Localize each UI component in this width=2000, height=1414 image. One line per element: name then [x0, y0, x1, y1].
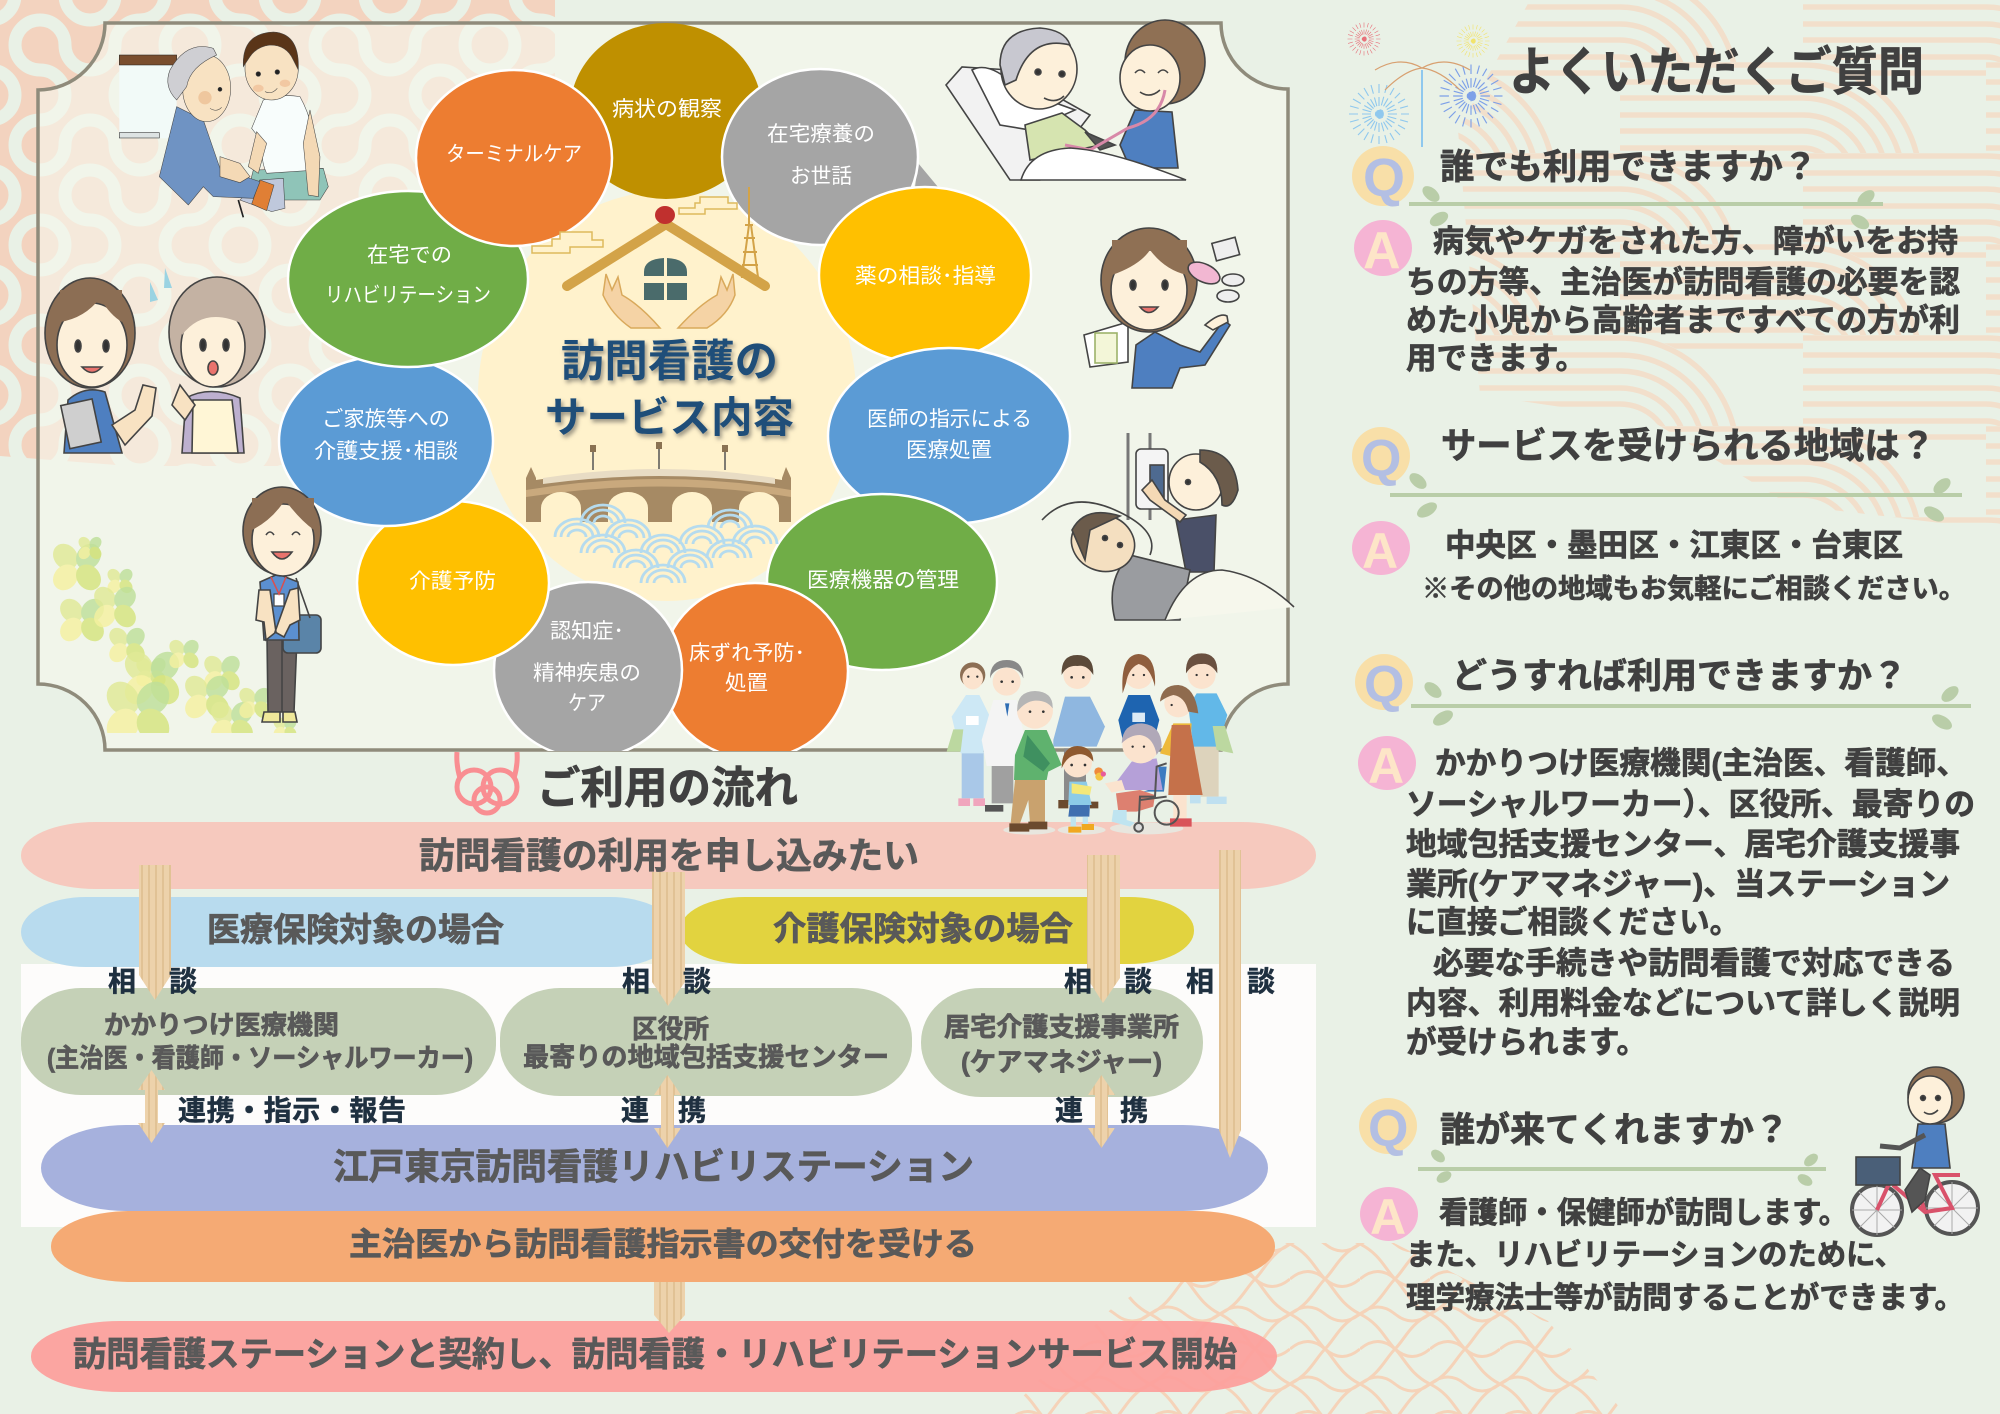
flow: かかりつけ医療機関: かかりつけ医療機関	[104, 1010, 339, 1040]
answer: かかりつけ医療機関(主治医、看護師、	[1435, 746, 1967, 781]
flow: 主治医から訪問看護指示書の交付を受ける	[51, 1211, 1275, 1282]
arrow: ward office to station	[654, 1075, 681, 1148]
flow: 介護保険対象の場合: 介護保険対象の場合	[773, 910, 1073, 947]
centre title: 訪問看護の	[561, 337, 778, 386]
FAQ 4	[1359, 1098, 1964, 1315]
A badge	[1358, 736, 1416, 794]
Q badge: Q	[1361, 430, 1401, 488]
illustration: family and care team	[947, 653, 1233, 835]
Q badge: Q	[1368, 1100, 1408, 1158]
flow: 医療保険対象の場合: 医療保険対象の場合	[207, 911, 504, 948]
answer: めた小児から高齢者まですべての方が利	[1406, 303, 1960, 338]
flow: 区役所: 最寄りの地域包括支援センター	[523, 1042, 889, 1072]
flow: 訪問看護の利用を申し込みたい: 訪問看護の利用を申し込みたい	[419, 835, 919, 876]
answer	[1406, 1196, 1964, 1315]
answer: ちの方等、主治医が訪問看護の必要を認	[1406, 265, 1960, 300]
circle: 床ずれ予防・処置	[662, 583, 848, 759]
A badge	[1352, 521, 1410, 579]
heading text: よくいただくご質問	[1509, 44, 1924, 102]
bubble tail	[915, 163, 938, 187]
answer: 看護師・保健師が訪問します。	[1439, 1196, 1848, 1230]
answer: 業所(ケアマネジャー)、当ステーション	[1406, 867, 1950, 902]
heading: ご利用の流れ: ご利用の流れ	[537, 764, 798, 813]
answer: 地域包括支援センター、居宅介護支援事	[1406, 827, 1960, 862]
flow: 区役所	[500, 988, 912, 1096]
circle: 在宅でのリハビリテーション: 在宅での	[367, 244, 452, 267]
Q badge	[1352, 427, 1410, 488]
label: 相談: 相 談	[1186, 966, 1275, 997]
A badge: A	[1362, 523, 1398, 579]
answer: 用できます。	[1406, 341, 1586, 376]
arrow: clinic to station	[138, 1070, 165, 1143]
A badge: A	[1363, 222, 1401, 280]
circle: 医師の指示による医療処置	[828, 348, 1070, 524]
answer	[1406, 224, 1960, 376]
icon: roof	[567, 224, 765, 286]
answer	[1406, 746, 1975, 1060]
FAQ 2	[1352, 425, 1966, 604]
answer: 理学療法士等が訪問することができます。	[1406, 1281, 1964, 1315]
arrow: to care office	[1087, 855, 1120, 1003]
circle: ご家族等への介護支援・相談: 介護支援･相談	[314, 440, 458, 463]
flow: サービス開始: 訪問看護ステーションと契約し、訪問看護・リハビリテーションサービス開始	[73, 1336, 1237, 1374]
circle: 認知症・精神疾患のケア	[494, 582, 682, 758]
A badge: A	[1368, 738, 1404, 794]
arrow: care office to station	[1088, 1075, 1115, 1148]
label: 連携: 連 携	[621, 1095, 706, 1126]
circle: 病状の観察: 病状の観察	[612, 98, 722, 121]
flow: 江戸東京訪問看護リハビリステーション	[41, 1125, 1268, 1211]
circle: 介護予防: 介護予防	[409, 570, 496, 593]
answer: 病気やケガをされた方、障がいをお持	[1433, 224, 1958, 259]
centre cream blob	[478, 191, 856, 601]
circle: ご家族等への介護支援・相談	[279, 356, 493, 526]
icon: clouds	[532, 197, 737, 253]
arrow: to clinic	[139, 865, 171, 1000]
label: 連携: 連 携	[1055, 1095, 1148, 1126]
vine divider	[1409, 183, 1883, 232]
flow: 居宅介護支援事業所: (ケアマネジャー)	[961, 1047, 1162, 1077]
circle: 在宅でのリハビリテーション	[288, 191, 528, 367]
answer: ソーシャルワーカー）、区役所、最寄りの	[1406, 787, 1975, 822]
circle: 医師の指示による医療処置: 医療処置	[906, 439, 992, 462]
arrow: to ward office	[652, 872, 685, 1006]
circle: 医療機器の管理: 医療機器の管理	[807, 569, 959, 592]
flow: かかりつけ医療機関: (主治医・看護師・ソーシャルワーカー)	[47, 1043, 473, 1073]
background pattern: net	[1005, 1243, 1625, 1414]
Q badge: Q	[1363, 148, 1405, 208]
illustration: nurse adjusting IV pump	[1042, 433, 1294, 620]
centre title: サービス内容	[545, 394, 794, 441]
background pattern: peach swirls	[0, 0, 555, 466]
circle: 在宅でのリハビリテーション: リハビリテーション	[325, 284, 491, 307]
flow: サービス開始	[31, 1321, 1277, 1392]
illustration: nurse talking with older woman	[45, 268, 265, 453]
FAQ 1	[1352, 146, 1960, 376]
circle: ターミナルケア: ターミナルケア	[446, 143, 582, 166]
A badge: A	[1370, 1189, 1406, 1245]
flow: 江戸東京訪問看護リハビリステーション: 江戸東京訪問看護リハビリステーション	[333, 1146, 974, 1187]
Q badge: Q	[1364, 656, 1404, 714]
icon: red sun	[655, 206, 675, 224]
circle: 医療機器の管理	[767, 494, 997, 670]
flow: 居宅介護支援事業所: 居宅介護支援事業所	[944, 1012, 1179, 1042]
circle: 薬の相談・指導	[819, 187, 1031, 363]
icon: fireworks	[1348, 22, 1502, 147]
arrow: to contract	[654, 1282, 685, 1333]
circle: 在宅療養のお世話: 在宅療養の	[767, 123, 875, 146]
circle: 認知症・精神疾患のケア: 精神疾患の	[533, 662, 641, 685]
icon: window	[644, 258, 687, 300]
label: 連携・指示・報告: 連携・指示・報告	[178, 1095, 406, 1126]
circle: 認知症・精神疾患のケア: ケア	[568, 692, 606, 715]
centre title	[545, 337, 794, 441]
circle: ターミナルケア	[416, 70, 612, 246]
flow: 区役所: 区役所	[632, 1014, 709, 1044]
answer: また、リハビリテーションのために、	[1406, 1239, 1904, 1272]
vine divider	[1411, 679, 1971, 733]
circle: 薬の相談・指導: 薬の相談･指導	[855, 265, 996, 288]
question: サービスを受けられる地域は？	[1441, 425, 1935, 466]
circle: 在宅療養のお世話	[722, 69, 918, 245]
FAQ 3	[1355, 654, 1975, 1060]
circle: 介護予防	[357, 501, 549, 665]
background pattern: concentric arcs	[1458, 0, 2000, 530]
label: 相談: 相 談	[108, 966, 197, 997]
answer: 必要な手続きや訪問看護で対応できる	[1433, 946, 1955, 981]
FAQ heading with fireworks	[1348, 22, 1924, 147]
note: ※その他の地域もお気軽にご相談ください。	[1422, 573, 1966, 604]
icon: tower	[742, 187, 758, 277]
flow labels	[108, 966, 1275, 1126]
icon: mizuhiki knot	[457, 752, 517, 813]
label: 相談: 相 談	[1064, 966, 1152, 997]
flow: かかりつけ医療機関	[21, 988, 496, 1095]
answer: が受けられます。	[1406, 1025, 1647, 1060]
flow: 主治医から訪問看護指示書の交付を受ける: 主治医から訪問看護指示書の交付を受ける	[349, 1226, 977, 1262]
arrow: to station	[1219, 850, 1241, 1158]
icon: bridge	[526, 442, 791, 522]
illustration: nurse checking blood pressure of patient in bed	[946, 20, 1205, 180]
icon: hands	[603, 274, 735, 328]
heading: ご利用の流れ	[457, 752, 798, 813]
centre illustration: house and hands	[532, 187, 765, 328]
illustration: nurse with bag	[243, 487, 321, 722]
Q badge	[1359, 1098, 1417, 1158]
question: 誰が来てくれますか？	[1440, 1111, 1789, 1150]
Q badge	[1352, 146, 1414, 208]
vine divider	[1390, 470, 1962, 525]
vine divider	[1418, 1147, 1826, 1188]
circle: 床ずれ予防・処置: 床ずれ予防･	[689, 642, 805, 665]
circle: 在宅療養のお世話: お世話	[790, 165, 852, 188]
illustration: rehabilitation with elderly woman	[119, 32, 328, 217]
A badge	[1354, 220, 1412, 280]
question: 誰でも利用できますか？	[1440, 148, 1817, 187]
circle: 医師の指示による医療処置: 医師の指示による	[867, 408, 1032, 431]
answer: 内容、利用料金などについて詳しく説明	[1406, 986, 1960, 1021]
flow panel background	[21, 964, 1316, 1227]
service panel frame	[38, 23, 1288, 750]
flow: 医療保険対象の場合	[21, 897, 675, 967]
flow: 居宅介護支援事業所	[921, 988, 1203, 1097]
circle: 床ずれ予防・処置: 処置	[725, 672, 768, 695]
question: どうすれば利用できますか？	[1452, 657, 1907, 696]
flow: 訪問看護の利用を申し込みたい	[21, 822, 1316, 889]
circle: 病状の観察	[570, 23, 762, 199]
answer: 中央区・墨田区・江東区・台東区	[1445, 528, 1903, 563]
service circle diagram	[279, 23, 1070, 759]
illustration: nurse on bicycle	[1852, 1067, 1978, 1235]
A badge	[1360, 1187, 1418, 1245]
icon: wave pattern	[555, 505, 777, 583]
circle: ご家族等への介護支援・相談: ご家族等への	[322, 408, 450, 431]
Q badge	[1355, 654, 1413, 714]
label: 相談: 相 談	[622, 966, 711, 997]
circle: 認知症・精神疾患のケア: 認知症･	[550, 620, 624, 643]
illustration: clovers	[53, 536, 296, 733]
flow: 介護保険対象の場合	[680, 897, 1194, 964]
answer: に直接ご相談ください。	[1406, 905, 1740, 940]
illustration: nurse explaining medicine	[1084, 228, 1244, 388]
